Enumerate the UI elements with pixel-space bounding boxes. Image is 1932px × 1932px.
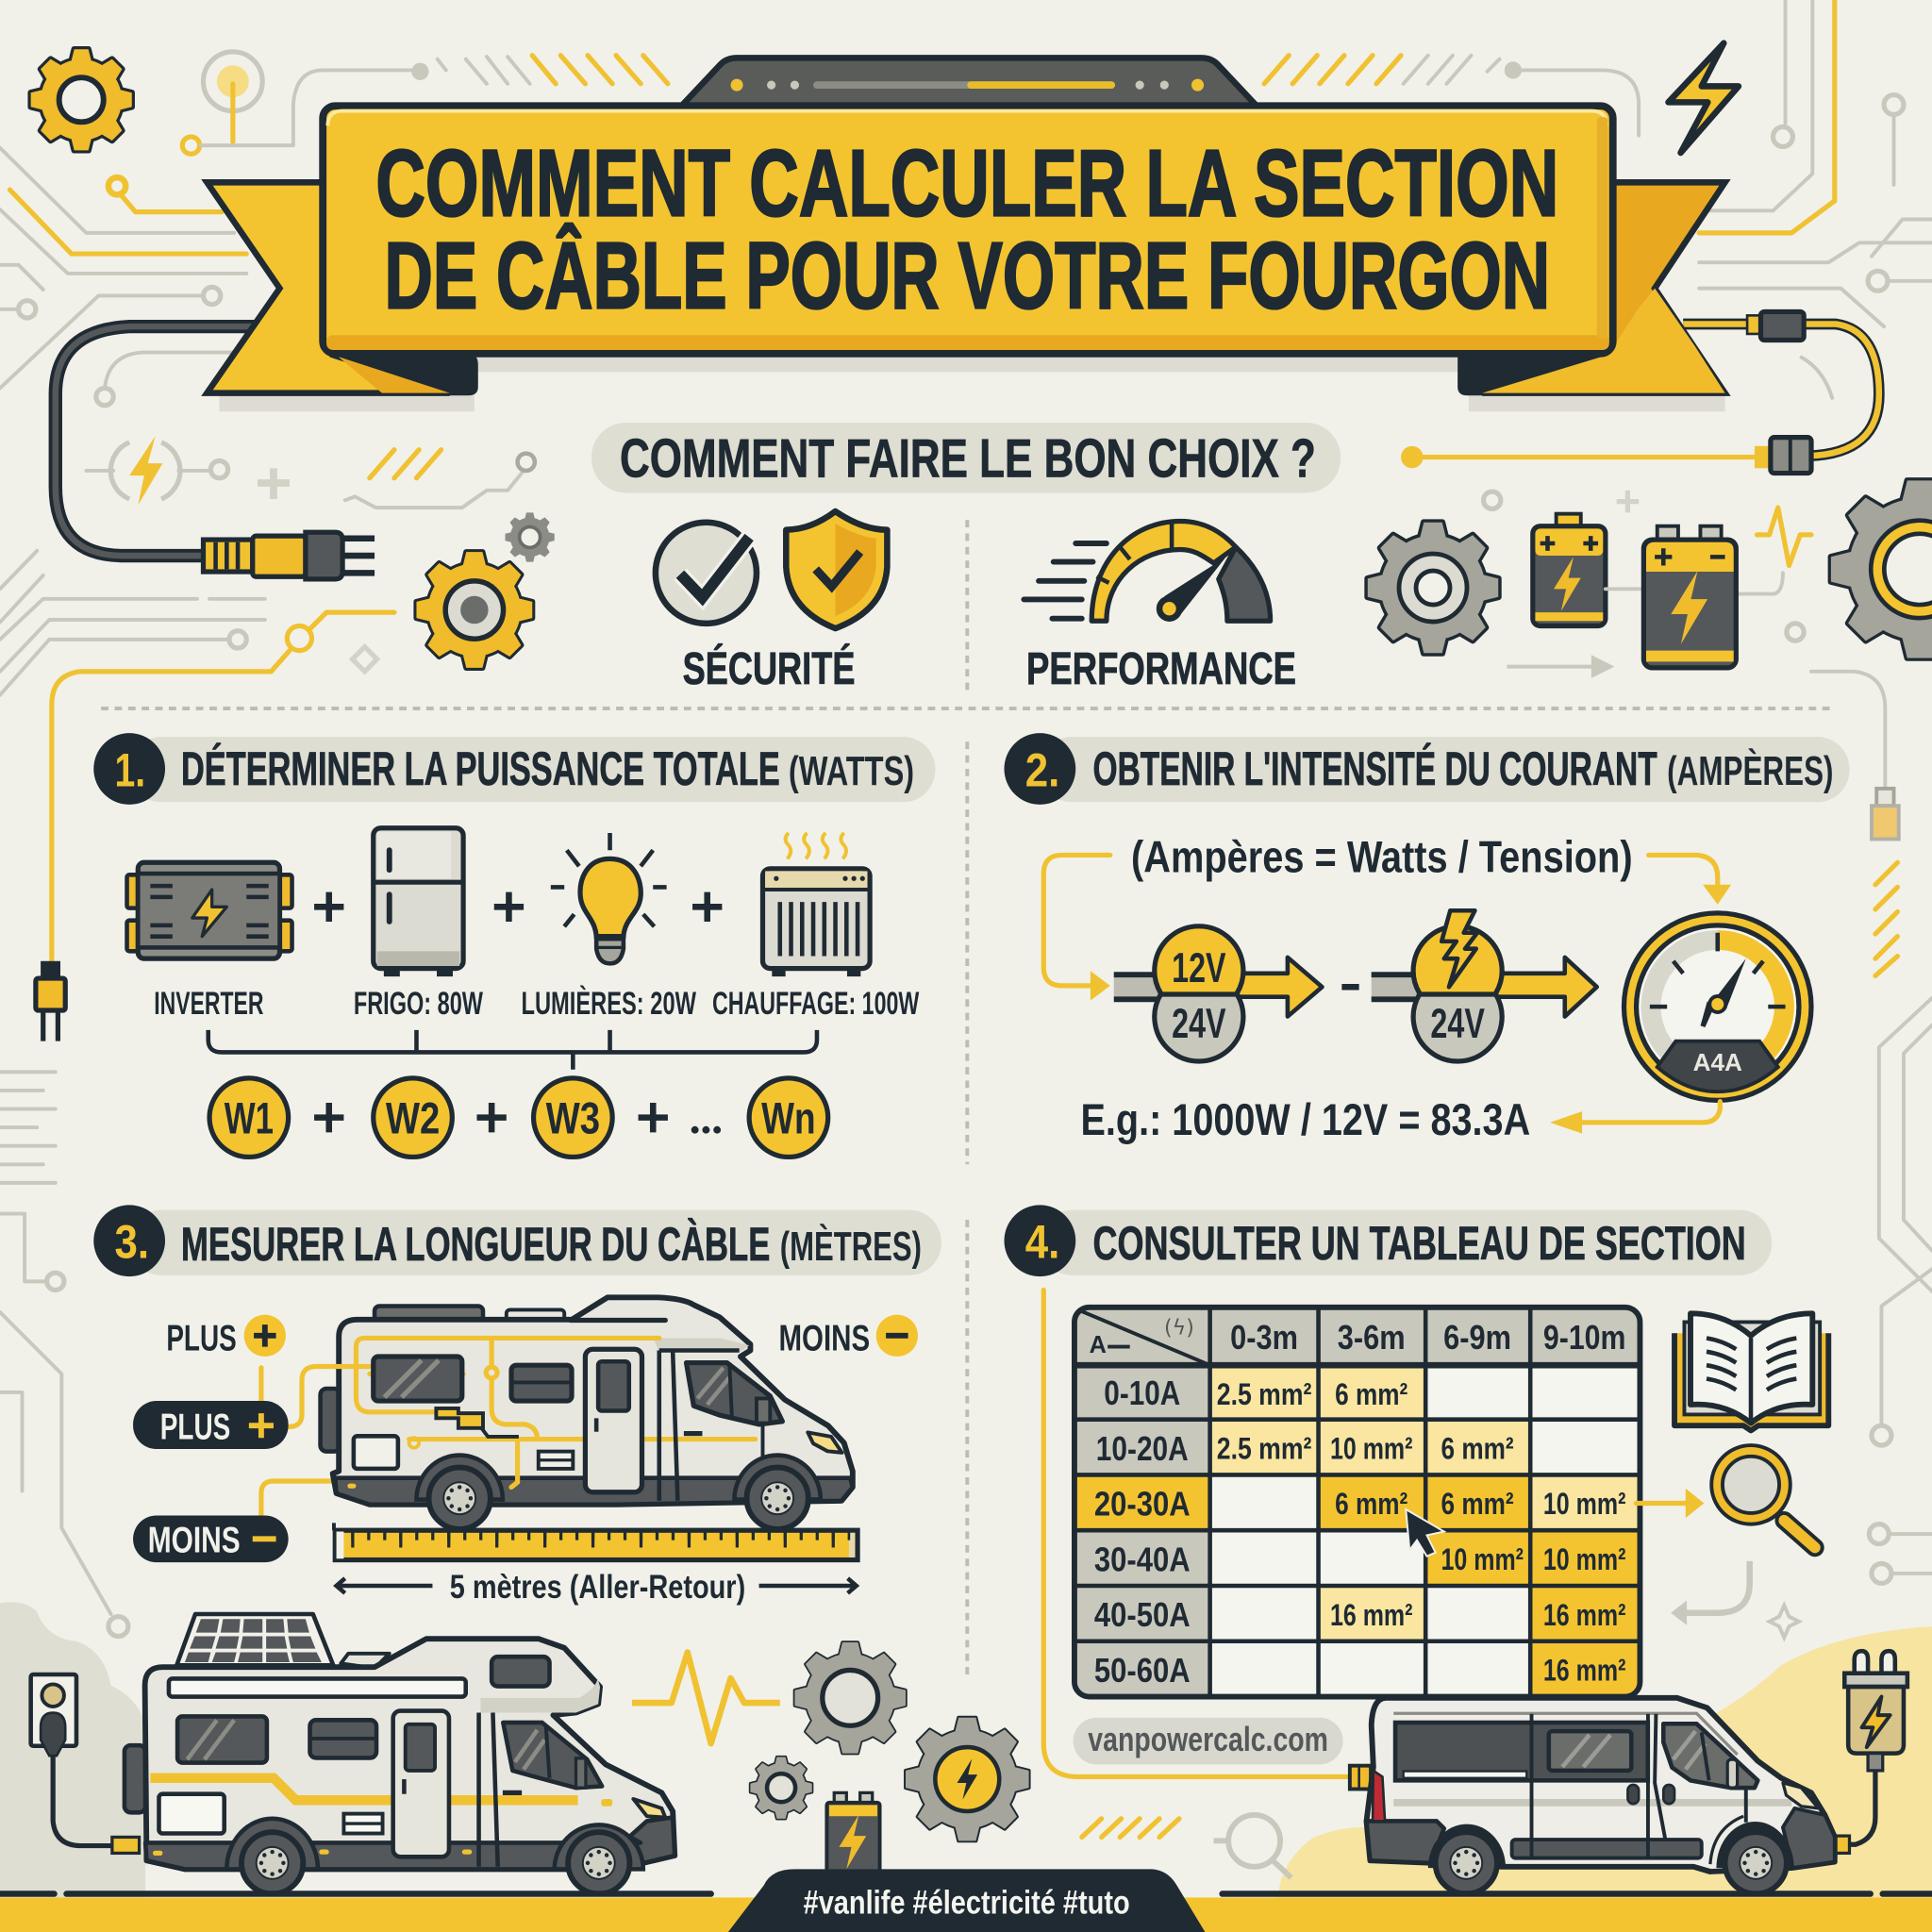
icon: check circle — [656, 523, 757, 624]
step 2 heading: 2. — [1025, 743, 1059, 796]
minus sign — [1341, 985, 1359, 990]
plus — [494, 892, 524, 922]
table row labels: 40-50A — [1094, 1595, 1191, 1634]
section table — [1074, 1307, 1640, 1697]
pulse line — [632, 1653, 780, 1743]
wiring connections — [261, 1366, 345, 1516]
circuit traces: mid left with bolt symbol — [86, 436, 535, 508]
watt formula: Wn — [761, 1093, 816, 1143]
table corner labels — [1090, 1316, 1194, 1358]
table values: 10 mm² — [1330, 1430, 1413, 1465]
table corner labels: A — [1090, 1330, 1107, 1358]
table values — [1217, 1376, 1626, 1688]
banner shadows — [219, 355, 1725, 411]
panel: step 2 — [1004, 733, 1849, 1144]
panel: step 4 — [1004, 1205, 1828, 1776]
voltage selector bolt/24V: 24V — [1430, 1001, 1485, 1047]
button: moins — [133, 1516, 289, 1562]
table values: 6 mm² — [1335, 1376, 1407, 1411]
panel: step 1 — [93, 733, 935, 1157]
watt formula — [209, 1078, 828, 1157]
voltage selector 12V/24V: 12V — [1172, 945, 1226, 991]
table values: 6 mm² — [1441, 1430, 1514, 1465]
appliance labels — [154, 986, 919, 1022]
circuit traces: lower left — [0, 551, 394, 961]
watt formula: W2 — [386, 1093, 440, 1143]
table row labels: 10-20A — [1096, 1429, 1189, 1468]
icon: small battery — [1533, 514, 1606, 626]
footer hashtag tab: #vanlife #électricité #tuto — [804, 1884, 1130, 1921]
table header: 6-9m — [1443, 1318, 1511, 1357]
step 1 heading: DÉTERMINER LA PUISSANCE TOTALE — [181, 742, 780, 795]
camper van at the bottom left — [125, 1614, 675, 1894]
label: moins top: MOINS — [778, 1319, 870, 1359]
icon: gear top left — [31, 49, 132, 150]
white van at the bottom right — [1350, 1698, 1835, 1894]
icon: magnifier — [1711, 1445, 1815, 1547]
table values: 16 mm² — [1543, 1653, 1626, 1688]
arrow: formula to gauge — [1649, 855, 1731, 905]
appliance labels: LUMIÈRES: 20W — [521, 986, 696, 1022]
gray return arrow and sparkle — [1671, 1561, 1799, 1638]
icon: power plug — [204, 532, 375, 579]
panel: step 3 — [93, 1205, 941, 1606]
step 4 heading: 4. — [1025, 1216, 1059, 1269]
step 2 heading: (AMPÈRES) — [1667, 749, 1834, 794]
appliance labels: INVERTER — [154, 986, 264, 1022]
table row labels: 0-10A — [1104, 1374, 1180, 1412]
table values: 2.5 mm² — [1217, 1430, 1311, 1465]
plus — [692, 892, 722, 922]
label: performance: PERFORMANCE — [1026, 643, 1296, 694]
label: sécurité: SÉCURITÉ — [683, 643, 855, 694]
table row labels — [1094, 1374, 1191, 1690]
icon: light bulb — [551, 833, 667, 963]
ammeter gauge — [1624, 913, 1811, 1100]
icon: wall socket with cable — [31, 1674, 140, 1853]
table header: 9-10m — [1543, 1318, 1625, 1357]
icon: lightning bolt top right — [1668, 43, 1739, 153]
title banner — [207, 58, 1725, 411]
voltage selector bolt/24V — [1372, 910, 1597, 1061]
banner top dark plate — [681, 58, 1257, 106]
table row labels: 20-30A — [1094, 1485, 1191, 1524]
icon: grey gear — [1368, 523, 1498, 653]
circuit traces: top left — [0, 52, 668, 406]
button: plus — [133, 1401, 289, 1449]
watt formula: W3 — [546, 1093, 600, 1143]
table corner labels: (ϟ) — [1164, 1316, 1194, 1341]
icon: book — [1674, 1313, 1828, 1430]
table values: 10 mm² — [1441, 1541, 1524, 1576]
table header — [1230, 1318, 1625, 1357]
website pill — [1074, 1718, 1343, 1764]
step 1 heading — [93, 733, 935, 805]
step 1 heading: 1. — [114, 743, 145, 796]
table row labels: 50-60A — [1094, 1651, 1191, 1690]
icon: gear with hole — [794, 1642, 906, 1754]
icon: large partial gear — [1831, 480, 1932, 658]
length arrows and label: 5 mètres (Aller-Retour) — [450, 1569, 745, 1606]
decorative small icons: right — [1484, 491, 1811, 675]
arrow: gauge to example — [1550, 1102, 1720, 1134]
table row labels: 30-40A — [1094, 1540, 1191, 1578]
icon: fridge — [374, 828, 463, 974]
yellow cable with connectors on the right — [1401, 311, 1879, 474]
table values: 6 mm² — [1441, 1486, 1514, 1521]
footer hashtag tab — [728, 1869, 1205, 1932]
step 3 heading: (MÈTRES) — [780, 1224, 922, 1270]
table values: 6 mm² — [1335, 1486, 1407, 1521]
table header: 3-6m — [1338, 1318, 1406, 1357]
table values: 10 mm² — [1543, 1541, 1626, 1576]
circuit traces: top right — [1264, 0, 1932, 398]
arrow: formula to cable — [1043, 855, 1110, 1001]
dashed dividers — [101, 520, 1834, 1675]
background blob: yellow — [1277, 1626, 1932, 1897]
table header: 0-3m — [1230, 1318, 1298, 1357]
yellow plug left — [36, 961, 65, 1041]
step 3 heading: MESURER LA LONGUEUR DU CÀBLE — [181, 1218, 770, 1271]
banner main panel — [323, 106, 1613, 354]
ruler — [334, 1523, 858, 1560]
step 4 heading — [1004, 1205, 1772, 1276]
ammeter gauge: A4A — [1693, 1048, 1742, 1076]
circuit traces: right side — [1811, 672, 1932, 1583]
table values: 2.5 mm² — [1217, 1376, 1311, 1411]
icon: inverter — [127, 862, 292, 958]
watt formula: W1 — [225, 1093, 274, 1143]
camper wiring — [335, 1338, 756, 1487]
icon: speedometer — [1024, 521, 1271, 621]
circuit traces: left side — [0, 1072, 128, 1637]
appliance labels: FRIGO: 80W — [354, 986, 483, 1022]
icon: gear with bolt — [906, 1718, 1029, 1840]
connector right — [1872, 789, 1899, 839]
length arrows and label — [337, 1569, 857, 1606]
ribbon left tail — [207, 182, 478, 395]
table values: 16 mm² — [1543, 1597, 1626, 1632]
step 3 heading — [93, 1205, 941, 1276]
bracket — [208, 1030, 817, 1070]
footer ground and strip — [0, 1894, 1932, 1932]
label: plus top: PLUS — [166, 1319, 237, 1359]
cursor — [1406, 1509, 1444, 1557]
appliance labels: CHAUFFAGE: 100W — [712, 986, 919, 1022]
subtitle pill — [591, 423, 1341, 492]
button: moins: MOINS — [148, 1521, 241, 1561]
icon: yellow gear with hub — [416, 552, 532, 668]
gray connector lines — [1606, 573, 1783, 594]
decorative slashes — [1082, 1819, 1179, 1837]
black power cable — [56, 326, 265, 556]
button: plus: PLUS — [160, 1407, 230, 1448]
camper illustration with wiring — [321, 1297, 853, 1529]
arrow: table to magnifier — [1637, 1489, 1704, 1518]
icon: heater — [762, 833, 870, 974]
icon: shield — [786, 511, 887, 628]
step 2 heading: OBTENIR L'INTENSITÉ DU COURANT — [1093, 742, 1657, 795]
icon: bottom battery — [826, 1792, 880, 1874]
step 3 heading: 3. — [114, 1216, 149, 1269]
icon: plug at right with cable — [1836, 1651, 1907, 1853]
example calculation: E.g.: 1000W / 12V = 83.3A — [1080, 1094, 1530, 1144]
voltage selector 12V/24V — [1114, 926, 1322, 1061]
subtitle pill: COMMENT FAIRE LE BON CHOIX ? — [620, 428, 1316, 489]
icon: small gear — [750, 1757, 812, 1819]
plus — [314, 892, 343, 922]
background blob: grey cloud — [0, 1602, 145, 1897]
voltage selector 12V/24V: 24V — [1172, 1001, 1226, 1047]
yellow conduit line — [1043, 1291, 1356, 1776]
ribbon right tail — [1457, 182, 1725, 395]
formula text: (Ampères = Watts / Tension) — [1131, 832, 1633, 882]
step 1 heading: (WATTS) — [789, 749, 914, 794]
icon: large battery — [1643, 526, 1736, 668]
icon: gray magnifier outline — [1214, 1815, 1291, 1878]
website pill: vanpowercalc.com — [1088, 1720, 1328, 1758]
table values: 16 mm² — [1330, 1597, 1413, 1632]
icon: small gear — [506, 512, 555, 562]
step 2 heading — [1004, 733, 1849, 805]
table values: 10 mm² — [1543, 1486, 1626, 1521]
